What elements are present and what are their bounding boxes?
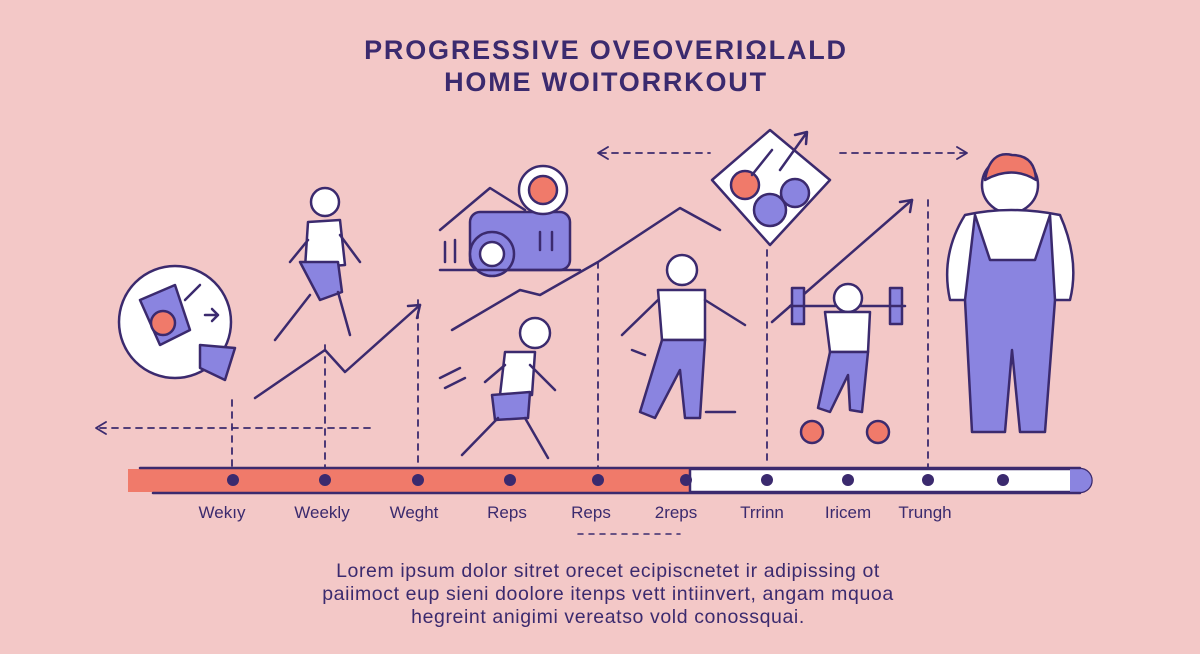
figure: walker: [275, 188, 360, 340]
title: [364, 35, 848, 97]
timeline labels: [199, 503, 952, 522]
timeline labels: Trrinn: [740, 503, 784, 522]
timeline labels: Iricem: [825, 503, 871, 522]
figure: large person: [947, 154, 1073, 432]
title: PROGRESSIVE OVEOVERIΩLALD: [364, 35, 848, 65]
description text: paiimoct eup sieni doolore itenps vett intiinvert, angam mquoa: [322, 583, 894, 605]
trend lines: [255, 305, 420, 398]
timeline labels: Wekıy: [199, 503, 246, 522]
timeline bar: [128, 468, 1092, 493]
description text: [322, 560, 894, 628]
timeline labels: Trungh: [898, 503, 952, 522]
timeline labels: Weght: [390, 503, 439, 522]
title: HOME WOITORRKOUT: [444, 67, 768, 97]
timeline labels: Reps: [487, 503, 527, 522]
figure: lifter: [790, 284, 905, 443]
timeline labels: Weekly: [294, 503, 350, 522]
figure: runner: [440, 318, 555, 458]
icon: circle badge: [119, 266, 235, 380]
timeline labels: 2reps: [655, 503, 697, 522]
icon: kettlebells: [440, 166, 580, 276]
icon: diamond arrows: [712, 130, 830, 245]
timeline labels: Reps: [571, 503, 611, 522]
figure: standing: [622, 255, 745, 418]
description text: Lorem ipsum dolor sitret orecet ecipiscnetet ir adipissing ot: [336, 560, 880, 582]
dashed arrows: [100, 153, 965, 470]
description text: hegreint anigimi vereatso vold conossquai.: [411, 606, 805, 628]
